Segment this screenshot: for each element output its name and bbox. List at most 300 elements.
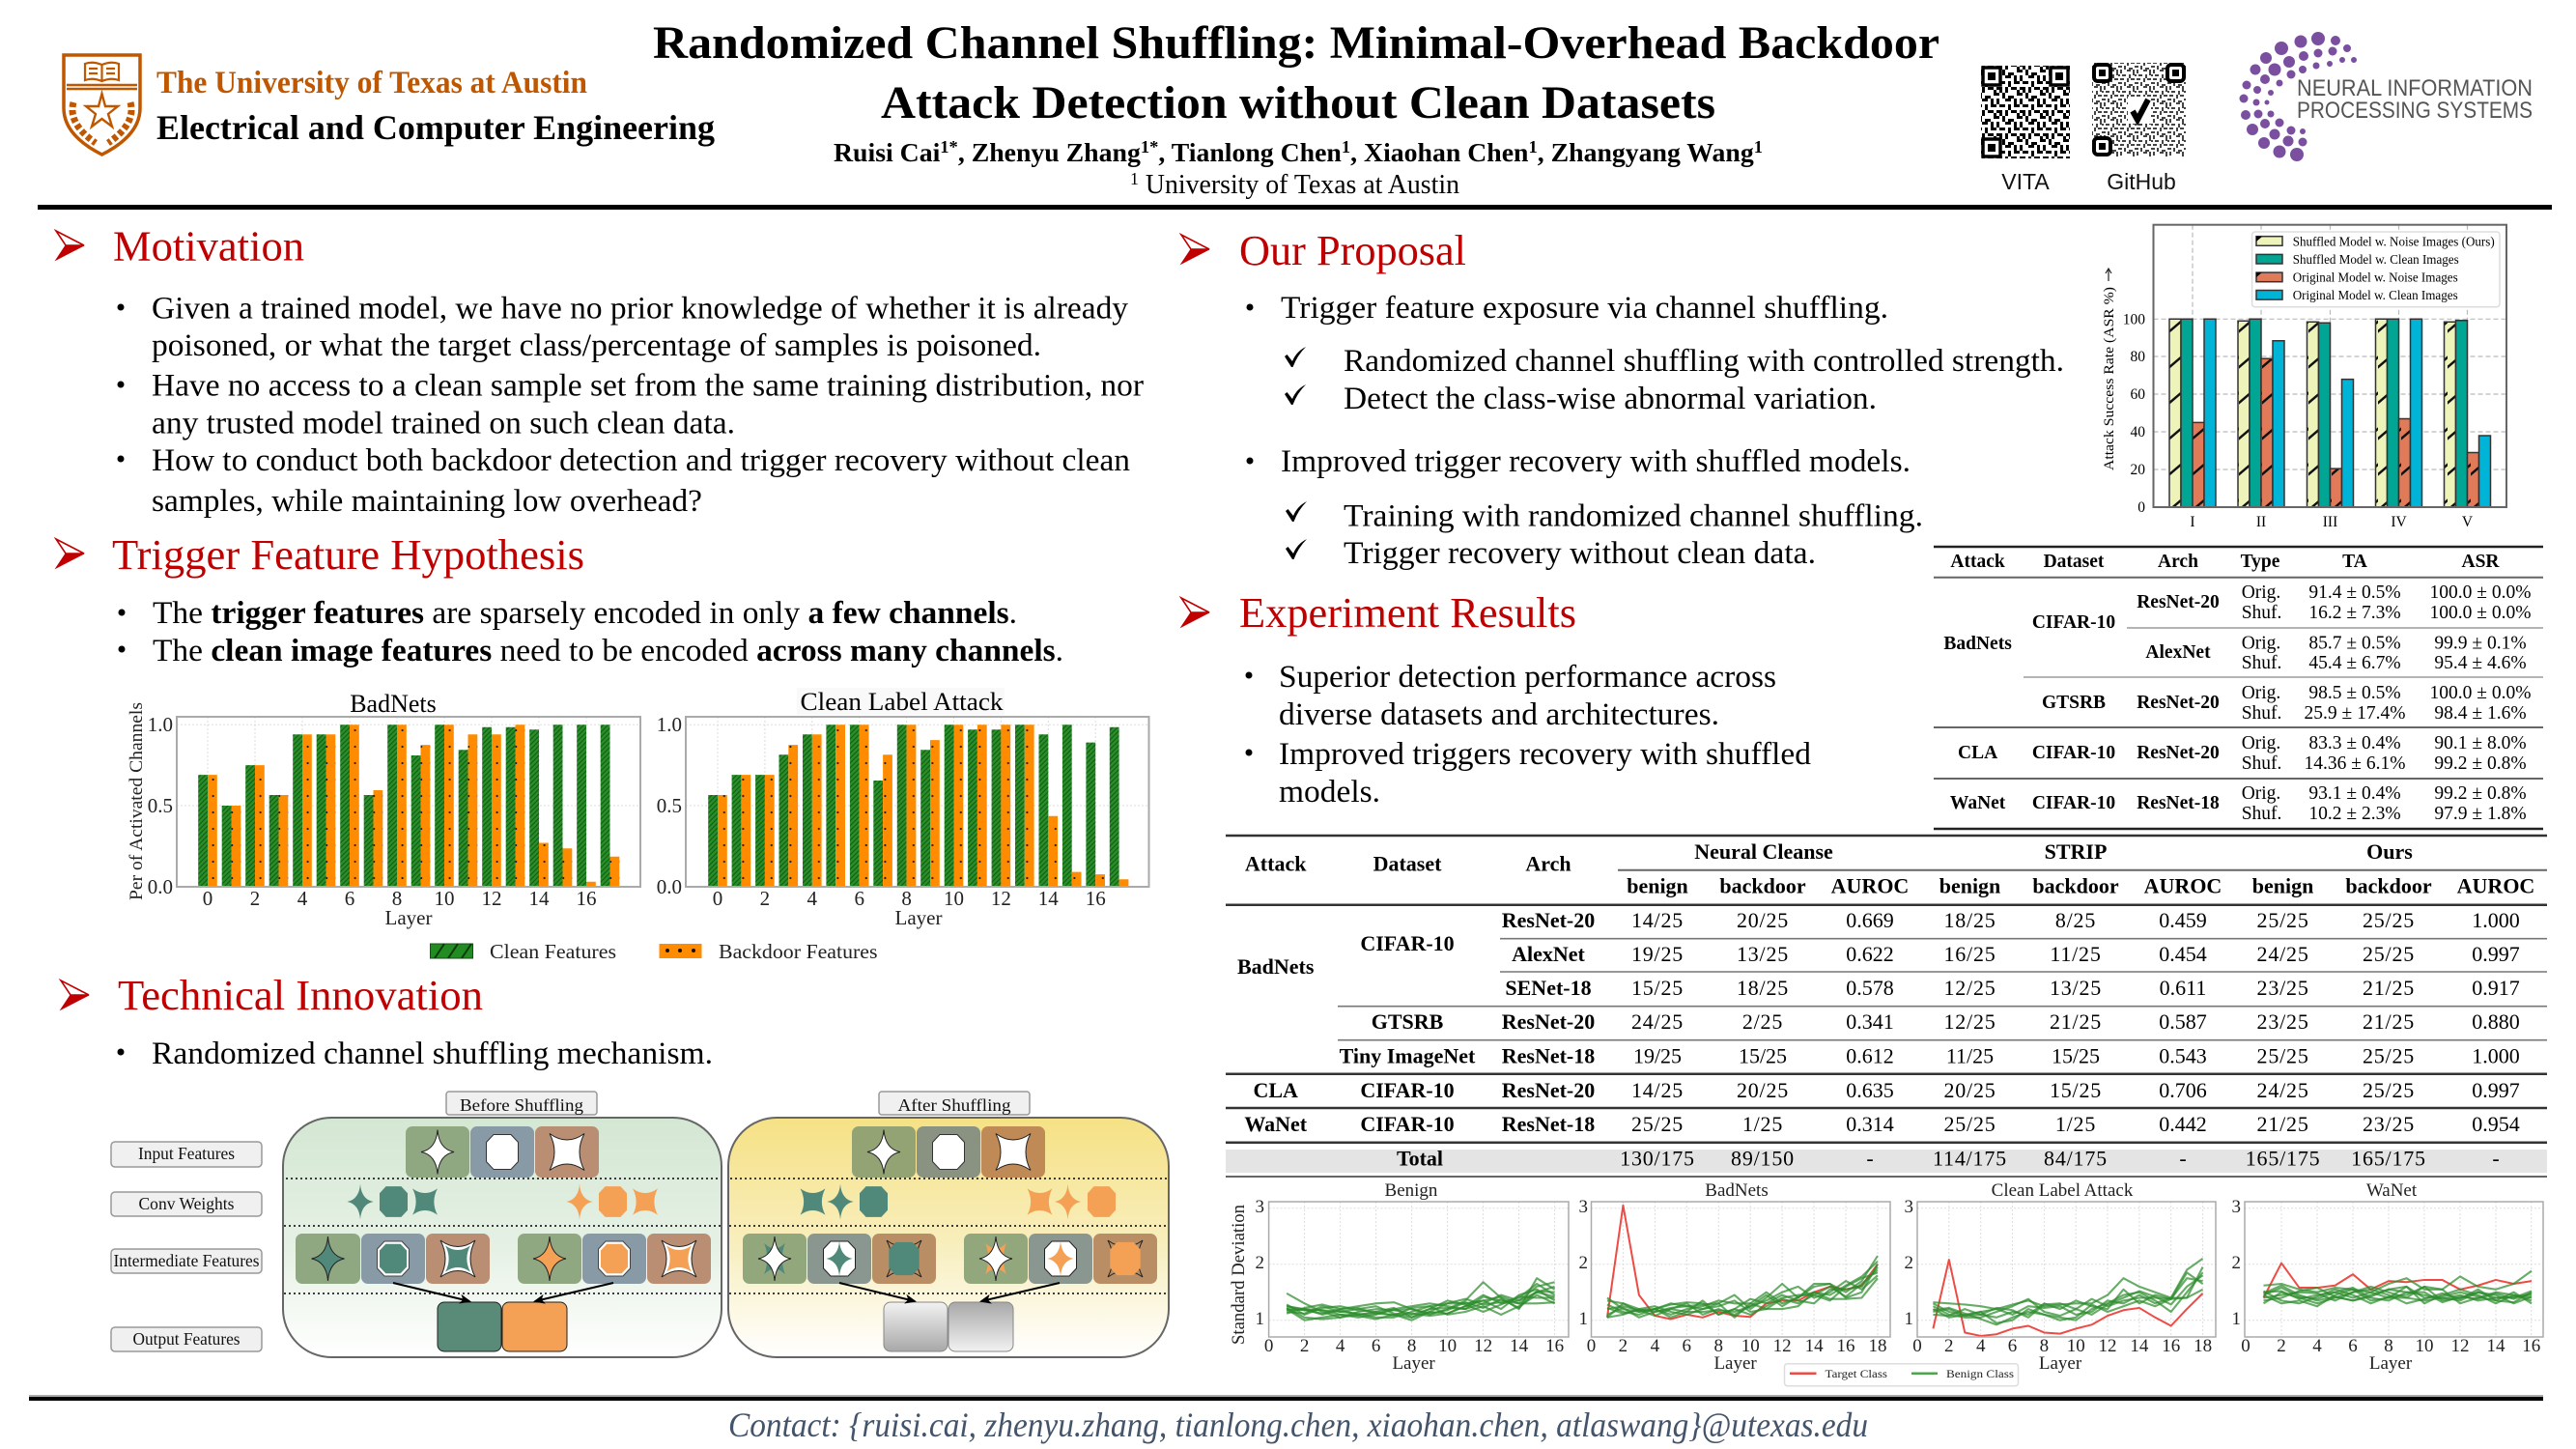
logo text: NeurIPS: PROCESSING SYSTEMS bbox=[2297, 98, 2533, 124]
line chart: BadNets: 2 bbox=[1619, 1336, 1628, 1356]
table values: 0.459 bbox=[2159, 908, 2207, 932]
text block: proposal list bbox=[1246, 291, 2064, 571]
table values: 0.635 bbox=[1846, 1078, 1894, 1102]
table rules bbox=[1226, 836, 2547, 1177]
line chart: Benign: 10 bbox=[1438, 1336, 1457, 1356]
row labels: Total bbox=[1397, 1147, 1443, 1171]
table values: 8/25 bbox=[2055, 908, 2096, 932]
table values: 13/25 bbox=[2050, 976, 2102, 1000]
text block: Hypothesis bullets: The clean image features need to be encoded across many channels. bbox=[153, 634, 1063, 668]
row labels: Tiny ImageNet bbox=[1340, 1043, 1476, 1068]
text block: Motivation bullets: poisoned, or what the target class/percentage of samples is poisoned. bbox=[152, 328, 1041, 363]
table values: 165/175 bbox=[2351, 1147, 2426, 1171]
table values: 12/25 bbox=[1943, 1009, 1996, 1034]
table values: 1.000 bbox=[2472, 1043, 2520, 1068]
row labels: Conv Weights bbox=[139, 1194, 235, 1213]
table values: 0.611 bbox=[2160, 976, 2206, 1000]
line chart: WaNet: 4 bbox=[2312, 1336, 2322, 1356]
authors: , Tianlong Chen bbox=[1158, 138, 1342, 167]
line chart: BadNets: Layer bbox=[1713, 1353, 1757, 1374]
axis labels: 100 bbox=[2123, 311, 2145, 327]
row labels: GTSRB bbox=[1372, 1009, 1444, 1034]
table header bbox=[1950, 552, 2500, 572]
bar chart: Clean Label Attack: 8 bbox=[901, 887, 912, 910]
bar chart: Clean Label Attack: 1.0 bbox=[657, 713, 682, 736]
line chart: Clean Label Attack: 4 bbox=[1976, 1336, 1986, 1356]
y axis label: Standard Deviation bbox=[1229, 1205, 1249, 1345]
logo text: university: The University of Texas at Austin bbox=[156, 66, 587, 100]
table header: Attack bbox=[1245, 852, 1307, 876]
bar chart: BadNets: 4 bbox=[297, 887, 308, 910]
table values: 25/25 bbox=[2363, 1078, 2415, 1102]
table body: 85.7 ± 0.5% bbox=[2308, 634, 2401, 654]
row labels: ResNet-20 bbox=[1502, 1078, 1595, 1102]
line chart: Clean Label Attack: 8 bbox=[2040, 1336, 2049, 1356]
line chart: Clean Label Attack bbox=[1905, 1180, 2216, 1374]
text block: results bullets: models. bbox=[1279, 775, 1380, 810]
table values: 14/25 bbox=[1631, 908, 1684, 932]
table body: ResNet-20 bbox=[2137, 693, 2220, 713]
bar chart: Clean Label Attack: 10 bbox=[944, 887, 964, 910]
table: trigger recovery results bbox=[1934, 547, 2543, 829]
line chart: Benign: 8 bbox=[1407, 1336, 1416, 1356]
table values: 19/25 bbox=[1631, 942, 1684, 966]
legend: target vs benign class: Benign Class bbox=[1946, 1367, 2014, 1380]
logo text: NeurIPS bbox=[2297, 75, 2533, 124]
QR code: GitHub bbox=[2092, 63, 2186, 156]
table header: AUROC bbox=[2457, 873, 2534, 898]
table values: 15/25 bbox=[1631, 976, 1684, 1000]
authors: , Zhenyu Zhang bbox=[958, 138, 1141, 167]
table header: Dataset bbox=[2044, 552, 2105, 572]
table body: ResNet-20 bbox=[2137, 743, 2220, 763]
heading: Trigger Feature Hypothesis: Trigger Feature Hypothesis bbox=[112, 531, 584, 579]
line chart: WaNet: 10 bbox=[2415, 1336, 2434, 1356]
table values: 25/25 bbox=[1943, 1112, 1996, 1136]
line chart: WaNet: 16 bbox=[2522, 1336, 2540, 1356]
row labels: Input Features bbox=[138, 1144, 235, 1163]
table values: 25/25 bbox=[2363, 908, 2415, 932]
table body: 16.2 ± 7.3% bbox=[2308, 603, 2401, 623]
table values: - bbox=[2179, 1147, 2187, 1171]
diagram: shuffling mechanism bbox=[111, 1092, 1169, 1357]
legend: feature types: Backdoor Features bbox=[719, 940, 877, 963]
table body: 93.1 ± 0.4% bbox=[2308, 783, 2401, 804]
axis labels bbox=[2102, 269, 2474, 530]
heading: Technical Innovation: Technical Innovation bbox=[118, 972, 483, 1019]
table values bbox=[1620, 908, 2520, 1171]
series: shuffled noise bbox=[2169, 319, 2455, 507]
table values: 21/25 bbox=[2363, 1009, 2415, 1034]
icon: Proposal arrow bbox=[1181, 235, 1209, 264]
table body: CIFAR-10 bbox=[2032, 612, 2115, 633]
chart legend: Original Model w. Clean Images bbox=[2293, 288, 2458, 302]
table body: 99.2 ± 0.8% bbox=[2434, 753, 2527, 774]
axis labels: 80 bbox=[2131, 349, 2145, 365]
row labels: SENet-18 bbox=[1505, 976, 1592, 1000]
axis labels: 20 bbox=[2131, 462, 2145, 478]
footer rule bbox=[29, 1395, 2543, 1401]
series: original clean bbox=[2204, 319, 2490, 507]
table body: Orig. bbox=[2242, 783, 2280, 804]
table header: Type bbox=[2241, 552, 2280, 572]
line chart: WaNet: 12 bbox=[2451, 1336, 2469, 1356]
table header: benign bbox=[2252, 873, 2313, 898]
output feature tiles bbox=[884, 1302, 1013, 1351]
table body: 10.2 ± 2.3% bbox=[2308, 804, 2401, 824]
table body: 99.2 ± 0.8% bbox=[2434, 783, 2527, 804]
table header: Arch bbox=[1525, 852, 1571, 876]
panel: Experiment Results bbox=[1181, 589, 1811, 810]
table body: WaNet bbox=[1950, 793, 2006, 813]
table header: Dataset bbox=[1373, 852, 1442, 876]
logo: NeurIPS dots bbox=[2239, 32, 2357, 161]
row labels: Output Features bbox=[133, 1329, 241, 1349]
table header: Ours bbox=[2366, 839, 2413, 864]
table values: 0.543 bbox=[2159, 1043, 2207, 1068]
row labels: CLA bbox=[1253, 1078, 1298, 1102]
table values: 15/25 bbox=[2052, 1043, 2100, 1068]
table header: backdoor bbox=[1719, 873, 1806, 898]
axis labels: II bbox=[2256, 514, 2266, 530]
heading: Motivation: Motivation bbox=[113, 222, 304, 270]
legend: feature types: Clean Features bbox=[490, 940, 616, 963]
authors: , Xiaohan Chen bbox=[1350, 138, 1528, 167]
table body: 100.0 ± 0.0% bbox=[2430, 683, 2531, 703]
table body: Orig. bbox=[2242, 634, 2280, 654]
table values: 1/25 bbox=[2055, 1112, 2096, 1136]
text block: proposal list: Improved trigger recovery with shuffled models. bbox=[1281, 444, 1911, 479]
table body: ResNet-18 bbox=[2137, 793, 2220, 813]
table values: 25/25 bbox=[1631, 1112, 1684, 1136]
table rules bbox=[1934, 547, 2543, 829]
table body: 91.4 ± 0.5% bbox=[2308, 582, 2401, 603]
bar chart: BadNets: 2 bbox=[250, 887, 260, 910]
table body: 83.3 ± 0.4% bbox=[2308, 733, 2401, 753]
table values: 20/25 bbox=[1737, 1078, 1789, 1102]
line chart: BadNets: 4 bbox=[1651, 1336, 1660, 1356]
icon: Motivation arrow bbox=[56, 231, 84, 260]
table body: Orig. bbox=[2242, 683, 2280, 703]
line chart: Clean Label Attack: 2 bbox=[1905, 1253, 1913, 1273]
y axis label: Per of Activated Channels bbox=[127, 702, 147, 900]
table header: Arch bbox=[2158, 552, 2198, 572]
line chart: Benign: 3 bbox=[1256, 1197, 1264, 1217]
line chart: Benign: Benign bbox=[1385, 1180, 1438, 1201]
affiliation: University of Texas at Austin bbox=[1139, 170, 1459, 200]
line chart: Benign: 2 bbox=[1300, 1336, 1309, 1356]
panel: Motivation bbox=[56, 222, 1144, 519]
table values: 24/25 bbox=[2257, 1078, 2309, 1102]
bar chart: Clean Label Attack: 12 bbox=[991, 887, 1011, 910]
label: GitHub: GitHub bbox=[2107, 169, 2176, 194]
chart legend: Shuffled Model w. Noise Images (Ours) bbox=[2293, 234, 2495, 248]
line chart: WaNet: Layer bbox=[2369, 1353, 2413, 1374]
line chart: BadNets: BadNets bbox=[1705, 1180, 1769, 1201]
axis labels: IV bbox=[2391, 514, 2407, 530]
table values: 0.341 bbox=[1846, 1009, 1894, 1034]
table body: ResNet-20 bbox=[2137, 592, 2220, 612]
panel: after shuffling bbox=[728, 1092, 1169, 1357]
logo text: NeurIPS: NEURAL INFORMATION bbox=[2297, 75, 2533, 101]
output feature tiles bbox=[438, 1302, 567, 1351]
table body: Orig. bbox=[2242, 582, 2280, 603]
chart title: Clean Label Attack: Clean Label Attack bbox=[800, 688, 1003, 716]
table values: 25/25 bbox=[2257, 908, 2309, 932]
bar chart: Clean Label Attack: 14 bbox=[1038, 887, 1059, 910]
line chart: Benign bbox=[1256, 1180, 1569, 1374]
table body: Shuf. bbox=[2242, 703, 2281, 724]
line chart: BadNets: 10 bbox=[1741, 1336, 1760, 1356]
text block: proposal list: Detect the class-wise abnormal variation. bbox=[1344, 382, 1877, 416]
line chart: Clean Label Attack: 14 bbox=[2130, 1336, 2149, 1356]
panel: Technical Innovation bbox=[61, 972, 713, 1071]
text block: Motivation bullets: any trusted model trained on such clean data. bbox=[152, 406, 735, 440]
line chart: BadNets: 0 bbox=[1587, 1336, 1596, 1356]
table values: 1/25 bbox=[1742, 1112, 1783, 1136]
table body: GTSRB bbox=[2042, 693, 2106, 713]
line chart: Benign: 12 bbox=[1474, 1336, 1492, 1356]
bar chart: BadNets: 16 bbox=[576, 887, 597, 910]
table header: STRIP bbox=[2045, 839, 2107, 864]
table header: Neural Cleanse bbox=[1694, 839, 1833, 864]
label: before shuffling: Before Shuffling bbox=[460, 1095, 583, 1115]
panel: before shuffling bbox=[283, 1092, 722, 1357]
axis labels: 60 bbox=[2131, 386, 2145, 403]
line chart: WaNet: 8 bbox=[2384, 1336, 2393, 1356]
bar chart: Clean Label Attack bbox=[657, 688, 1149, 929]
authors: Ruisi Cai bbox=[834, 138, 937, 167]
text block: proposal list: Training with randomized channel shuffling. bbox=[1344, 498, 1923, 533]
table values: - bbox=[1866, 1147, 1874, 1171]
row labels: ResNet-18 bbox=[1502, 1112, 1595, 1136]
authors: 1 bbox=[1754, 137, 1763, 156]
table body: 97.9 ± 1.8% bbox=[2434, 804, 2527, 824]
row labels: AlexNet bbox=[1512, 942, 1586, 966]
series: original noise bbox=[2193, 358, 2478, 507]
conv weights bbox=[347, 1184, 658, 1219]
table body: 100.0 ± 0.0% bbox=[2430, 582, 2531, 603]
bar chart: activated channels bbox=[127, 688, 1149, 963]
line chart: Benign: 1 bbox=[1256, 1309, 1264, 1329]
text block: results bullets: diverse datasets and architectures. bbox=[1279, 697, 1719, 732]
table body: BadNets bbox=[1943, 634, 2012, 654]
text block: results bullets: Superior detection performance across bbox=[1279, 660, 1776, 695]
table body: Shuf. bbox=[2242, 804, 2281, 824]
table body: 98.5 ± 0.5% bbox=[2308, 683, 2401, 703]
axis labels: Attack Success Rate (ASR %) bbox=[2102, 287, 2117, 470]
table header: benign bbox=[1939, 873, 2000, 898]
table body: CIFAR-10 bbox=[2032, 793, 2115, 813]
row labels: Intermediate Features bbox=[114, 1251, 260, 1270]
line chart: Benign: 4 bbox=[1336, 1336, 1345, 1356]
arrows bbox=[393, 1283, 613, 1301]
table body: CLA bbox=[1958, 743, 1997, 763]
line chart: Clean Label Attack: 18 bbox=[2194, 1336, 2212, 1356]
row labels: CIFAR-10 bbox=[1360, 931, 1455, 955]
chart legend: Original Model w. Noise Images bbox=[2293, 270, 2458, 285]
table values: 25/25 bbox=[2363, 942, 2415, 966]
axis labels: 0 bbox=[2137, 499, 2145, 516]
table values: 0.454 bbox=[2159, 942, 2207, 966]
line chart: Clean Label Attack: 1 bbox=[1905, 1309, 1913, 1329]
table values: 165/175 bbox=[2246, 1147, 2320, 1171]
label: after shuffling bbox=[879, 1092, 1030, 1115]
table body: 25.9 ± 17.4% bbox=[2305, 703, 2405, 724]
line chart: WaNet: 2 bbox=[2277, 1336, 2286, 1356]
table body: Shuf. bbox=[2242, 753, 2281, 774]
text block: results bullets: Improved triggers recovery with shuffled bbox=[1279, 737, 1811, 772]
table values: 21/25 bbox=[2050, 1009, 2102, 1034]
table values: 84/175 bbox=[2044, 1147, 2108, 1171]
line chart: Clean Label Attack: 2 bbox=[1944, 1336, 1954, 1356]
table body: 98.4 ± 1.6% bbox=[2434, 703, 2527, 724]
text block: proposal list: Trigger feature exposure via channel shuffling. bbox=[1281, 291, 1888, 326]
table values: 0.314 bbox=[1846, 1112, 1894, 1136]
table values: 0.880 bbox=[2472, 1009, 2520, 1034]
line chart: Clean Label Attack: 10 bbox=[2067, 1336, 2085, 1356]
conv weights bbox=[801, 1184, 1116, 1219]
table values: 0.622 bbox=[1846, 942, 1894, 966]
title: Attack Detection without Clean Datasets bbox=[881, 77, 1715, 128]
line chart: WaNet: WaNet bbox=[2366, 1180, 2418, 1201]
chart legend: Shuffled Model w. Clean Images bbox=[2293, 252, 2459, 267]
table values: 89/150 bbox=[1731, 1147, 1795, 1171]
bar chart: BadNets: 0 bbox=[203, 887, 212, 910]
text block: Motivation bullets: How to conduct both backdoor detection and trigger recovery without clean bbox=[152, 443, 1130, 478]
row labels: CIFAR-10 bbox=[1360, 1078, 1455, 1102]
arrows bbox=[839, 1283, 1060, 1301]
authors: 1 bbox=[1528, 137, 1538, 156]
line chart: Clean Label Attack: 3 bbox=[1905, 1197, 1913, 1217]
table body: 100.0 ± 0.0% bbox=[2430, 603, 2531, 623]
legend: target vs benign class: Target Class bbox=[1826, 1367, 1887, 1380]
table values: 23/25 bbox=[2257, 976, 2309, 1000]
line chart: Clean Label Attack: 6 bbox=[2008, 1336, 2017, 1356]
table values: 0.587 bbox=[2159, 1009, 2207, 1034]
bar chart: Clean Label Attack: 4 bbox=[807, 887, 818, 910]
label: VITA: VITA bbox=[2001, 169, 2050, 194]
table values: 21/25 bbox=[2363, 976, 2415, 1000]
table header: backdoor bbox=[2345, 873, 2432, 898]
table header: Attack bbox=[1950, 552, 2005, 572]
table body: 90.1 ± 8.0% bbox=[2434, 733, 2527, 753]
table body: 45.4 ± 6.7% bbox=[2308, 653, 2401, 673]
bar chart: Clean Label Attack: 2 bbox=[760, 887, 770, 910]
title: Randomized Channel Shuffling: Minimal-Overhead Backdoor bbox=[653, 17, 1939, 69]
table values: 0.706 bbox=[2159, 1078, 2207, 1102]
line chart: BadNets: 8 bbox=[1714, 1336, 1723, 1356]
bar chart: BadNets: 0.0 bbox=[148, 875, 173, 898]
table values: 20/25 bbox=[1737, 908, 1789, 932]
table values: 0.917 bbox=[2472, 976, 2520, 1000]
table values: 130/175 bbox=[1620, 1147, 1695, 1171]
bar chart: Clean Label Attack: Layer bbox=[895, 906, 942, 929]
table header: AUROC bbox=[2144, 873, 2222, 898]
axis labels: I bbox=[2190, 514, 2195, 530]
text block: results bullets bbox=[1246, 660, 1811, 810]
header rule bbox=[38, 205, 2552, 210]
text block: Motivation bullets: samples, while maintaining low overhead? bbox=[152, 484, 702, 519]
table values: 0.997 bbox=[2472, 1078, 2520, 1102]
authors: 1 bbox=[1342, 137, 1350, 156]
line charts: standard deviation bbox=[1229, 1180, 2543, 1386]
table body: CIFAR-10 bbox=[2032, 743, 2115, 763]
row labels: ResNet-20 bbox=[1502, 1009, 1595, 1034]
line chart: Clean Label Attack: Layer bbox=[2039, 1353, 2082, 1374]
row labels: WaNet bbox=[1244, 1112, 1308, 1136]
table values: 23/25 bbox=[2257, 1009, 2309, 1034]
table values: 0.612 bbox=[1846, 1043, 1894, 1068]
line chart: BadNets: 12 bbox=[1773, 1336, 1792, 1356]
table values: 11/25 bbox=[2050, 942, 2102, 966]
chart title: BadNets: BadNets bbox=[350, 690, 437, 718]
table body: 99.9 ± 0.1% bbox=[2434, 634, 2527, 654]
bar chart: BadNets: 8 bbox=[392, 887, 402, 910]
bar chart: BadNets: 12 bbox=[481, 887, 502, 910]
table values: 18/25 bbox=[1737, 976, 1789, 1000]
table body: Orig. bbox=[2242, 733, 2280, 753]
table header: backdoor bbox=[2032, 873, 2119, 898]
table values: 11/25 bbox=[1946, 1043, 1994, 1068]
table values: 20/25 bbox=[1943, 1078, 1996, 1102]
axis labels: V bbox=[2462, 514, 2474, 530]
bar chart: BadNets: 0.5 bbox=[148, 794, 173, 817]
bar chart: BadNets: 14 bbox=[529, 887, 550, 910]
table values: 23/25 bbox=[2363, 1112, 2415, 1136]
table values: 0.578 bbox=[1846, 976, 1894, 1000]
line chart: WaNet: 14 bbox=[2486, 1336, 2505, 1356]
table header: ASR bbox=[2461, 552, 2500, 572]
bar chart: BadNets: 6 bbox=[345, 887, 354, 910]
table values: 24/25 bbox=[1631, 1009, 1684, 1034]
line chart: Benign: 6 bbox=[1372, 1336, 1380, 1356]
table body: Shuf. bbox=[2242, 653, 2281, 673]
row labels: ResNet-20 bbox=[1502, 908, 1595, 932]
text block: Motivation bullets: Given a trained model, we have no prior knowledge of whether it is already bbox=[152, 292, 1128, 327]
row labels: ResNet-18 bbox=[1502, 1043, 1595, 1068]
total row shading bbox=[1226, 1150, 2547, 1173]
line chart: WaNet: 2 bbox=[2231, 1253, 2241, 1273]
intermediate feature tiles bbox=[743, 1234, 1157, 1284]
heading: Our Proposal: Our Proposal bbox=[1239, 227, 1466, 274]
row labels: BadNets bbox=[1237, 954, 1315, 979]
input feature tiles bbox=[852, 1126, 1045, 1178]
table values: 12/25 bbox=[1943, 976, 1996, 1000]
panel: Our Proposal bbox=[1181, 227, 2064, 571]
table values: 16/25 bbox=[1943, 942, 1996, 966]
table header: TA bbox=[2342, 552, 2367, 572]
contact line: Contact: {ruisi.cai, zhenyu.zhang, tianlong.chen, xiaohan.chen, atlaswang}@utexas.edu bbox=[728, 1406, 1868, 1444]
line chart: BadNets: 3 bbox=[1578, 1197, 1588, 1217]
heading: Experiment Results: Experiment Results bbox=[1239, 589, 1576, 637]
table values: 21/25 bbox=[2257, 1112, 2309, 1136]
table: detection results bbox=[1226, 836, 2547, 1177]
chart legend bbox=[2252, 232, 2500, 307]
line chart: WaNet: 3 bbox=[2231, 1197, 2241, 1217]
line chart: WaNet: 6 bbox=[2348, 1336, 2358, 1356]
icon: Results arrow bbox=[1181, 598, 1209, 627]
bar chart: Clean Label Attack: 0.0 bbox=[657, 875, 682, 898]
line chart: BadNets: 6 bbox=[1683, 1336, 1691, 1356]
table body: AlexNet bbox=[2145, 642, 2211, 663]
affiliation: 1 bbox=[1130, 169, 1139, 188]
legend: target vs benign class bbox=[1785, 1364, 2019, 1386]
line chart: BadNets: 18 bbox=[1868, 1336, 1887, 1356]
panel: Trigger Feature Hypothesis bbox=[56, 531, 1063, 668]
bar chart: BadNets: Layer bbox=[385, 906, 432, 929]
authors: 1* bbox=[940, 137, 958, 156]
